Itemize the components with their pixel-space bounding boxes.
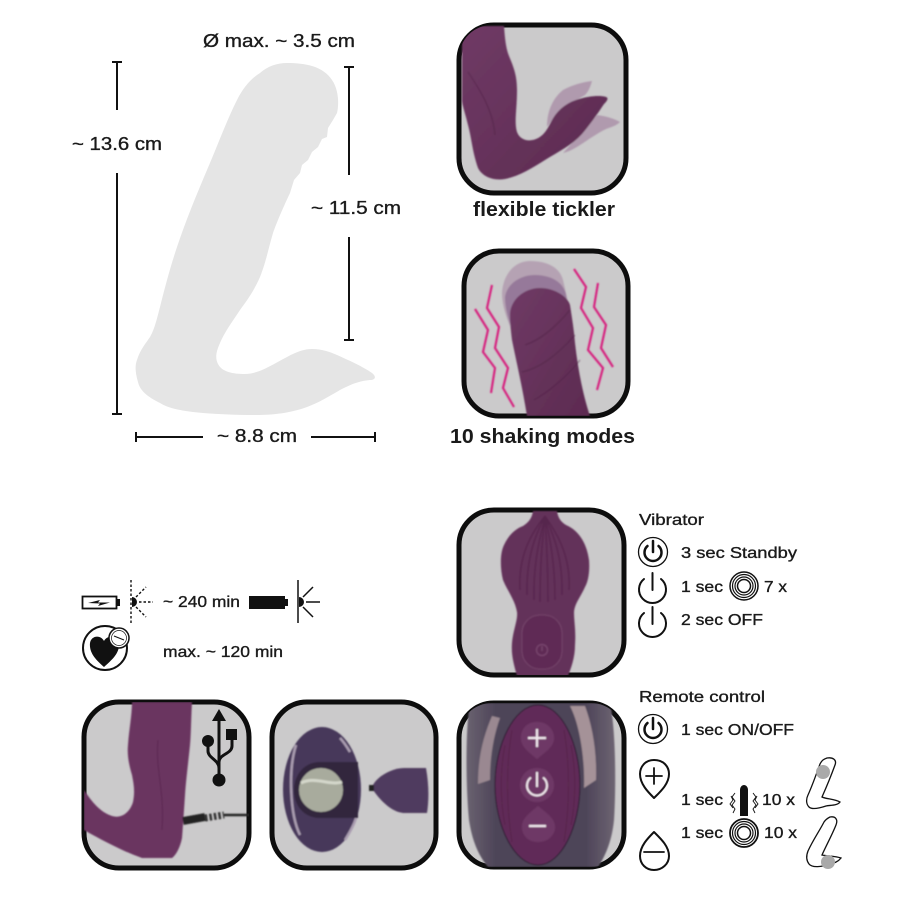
control plate [522, 615, 562, 669]
power button [520, 768, 554, 802]
icon: power circled [638, 538, 668, 566]
icon: full battery [249, 596, 288, 609]
text: runtime: max. ~ 120 min [163, 644, 283, 661]
icon: power open off [639, 607, 666, 637]
icon: pulsation rings [730, 572, 758, 600]
text: on off: 1 sec ON/OFF [681, 722, 794, 739]
dimension: diameter: Ø max. ~ 3.5 cm [203, 31, 355, 51]
minus button [522, 806, 555, 842]
heading: remote control: Remote control [639, 689, 765, 706]
remote housing [466, 703, 615, 867]
icon: USB [202, 709, 237, 786]
text: standby: 3 sec Standby [681, 545, 797, 562]
device body [84, 702, 192, 858]
highlights [478, 716, 500, 784]
plus button [521, 722, 554, 759]
icon: power open [639, 573, 666, 603]
icon: outline upper zone [807, 758, 840, 809]
remote back oval [283, 727, 361, 852]
ghost tip upper [547, 81, 592, 127]
panel: vibrator button [459, 510, 624, 676]
icon: light solid [298, 580, 320, 623]
vibration zigzags [475, 269, 613, 407]
shaft [510, 288, 590, 416]
product silhouette [136, 63, 375, 415]
text: charge time: ~ 240 min [163, 594, 240, 611]
icon: charging light dashed [131, 580, 153, 623]
icon: remote power [638, 714, 668, 744]
tickler body [462, 26, 607, 179]
ghost position far [502, 260, 568, 326]
ghost position near [504, 274, 567, 324]
icon: charging battery [82, 596, 120, 608]
heading: vibrator controls: Vibrator [639, 512, 705, 529]
dimension: overall height [72, 62, 162, 414]
text: one second: 1 sec [681, 579, 723, 596]
button oval [495, 705, 580, 865]
dimension: overall height: ~ 13.6 cm [72, 134, 162, 154]
caption: flexible tickler: flexible tickler [473, 199, 615, 221]
icon: plus drop [640, 760, 669, 798]
battery compartment [294, 762, 358, 818]
dimension: insertable length: ~ 11.5 cm [311, 198, 401, 218]
icon: minus drop [640, 832, 669, 870]
text: ten times two: 10 x [764, 825, 797, 842]
ribs [520, 516, 569, 602]
panel: shaking modes [464, 251, 628, 416]
dimension: width [136, 426, 375, 446]
charging cable [183, 815, 250, 821]
panel: flexible tickler [459, 25, 626, 193]
dimension: insertable length [311, 67, 401, 340]
text: seven times: 7 x [764, 579, 787, 596]
panel: battery replacement [272, 702, 436, 868]
vibrator body [501, 511, 589, 676]
icon: outline lower zone [807, 817, 841, 869]
coin battery [299, 768, 343, 812]
dimension: width: ~ 8.8 cm [217, 426, 297, 446]
text: off: 2 sec OFF [681, 612, 763, 629]
power symbol [536, 644, 548, 656]
battery cover [373, 768, 428, 813]
text: ten times one: 10 x [762, 792, 795, 809]
panel: USB charging [84, 702, 250, 868]
icon: vibrating bullet [730, 785, 758, 816]
icon: heart and clock [83, 626, 129, 670]
text: plus one second: 1 sec [681, 792, 723, 809]
ghost tip lower [563, 115, 620, 153]
caption: shaking modes: 10 shaking modes [450, 426, 635, 448]
text: minus one second: 1 sec [681, 825, 723, 842]
icon: rings large [730, 819, 758, 847]
panel: remote control [459, 703, 624, 867]
